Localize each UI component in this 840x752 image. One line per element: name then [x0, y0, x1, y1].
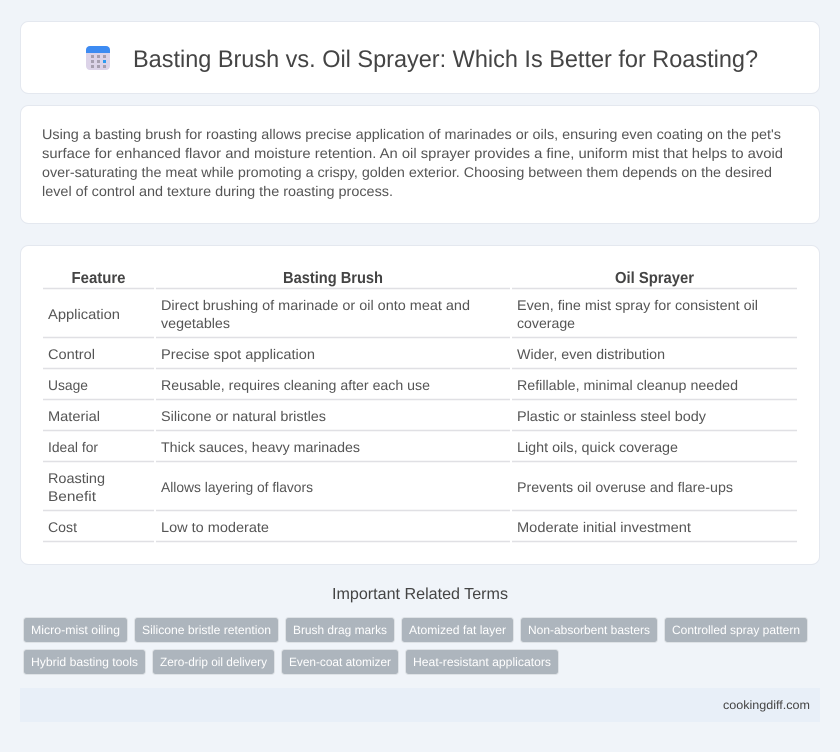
row: ideal for: [48, 439, 678, 455]
panel: header: [20, 22, 820, 94]
row: control: [48, 346, 665, 362]
row: material: Material: [48, 408, 100, 424]
icon: calendar: [86, 46, 110, 70]
row: application: [48, 297, 758, 331]
related term tags: Atomized fat layer: [409, 623, 506, 637]
related term tags: Heat-resistant applicators: [413, 655, 551, 669]
row: roasting benefit: Allows layering of flavors: [161, 479, 313, 495]
related term tags: Non-absorbent basters: [528, 623, 650, 637]
table header: Feature: [72, 270, 126, 287]
row: control: Wider, even distribution: [517, 346, 665, 362]
row: material: Silicone or natural bristles: [161, 408, 326, 424]
row: ideal for: Thick sauces, heavy marinades: [161, 439, 360, 455]
row: application: Application: [48, 306, 120, 322]
related term tags: Controlled spray pattern: [672, 623, 800, 637]
related term tags: Even-coat atomizer: [289, 655, 391, 669]
row: cost: Cost: [48, 519, 77, 535]
footer: [20, 688, 820, 722]
related term tags: Brush drag marks: [293, 623, 387, 637]
panel: comparison table: [20, 246, 820, 564]
table header: [72, 270, 694, 287]
intro text: Using a basting brush for roasting allows precise application of marinades or oils, ensuring even coating on the pet's: [42, 126, 781, 142]
row: ideal for: Light oils, quick coverage: [517, 439, 678, 455]
row: control: Control: [48, 346, 95, 362]
row: cost: Moderate initial investment: [517, 519, 691, 535]
related term tags: [24, 618, 808, 674]
intro text: over-saturating the meat while promoting a crispy, golden exterior. Choosing between them depends on the desired: [42, 164, 772, 180]
heading: related terms: Important Related Terms: [332, 586, 508, 603]
row: cost: [48, 519, 691, 535]
intro text: [42, 126, 783, 199]
table header: Basting Brush: [283, 270, 383, 287]
row: control: Precise spot application: [161, 346, 315, 362]
row: cost: Low to moderate: [161, 519, 269, 535]
related term tags: Hybrid basting tools: [31, 655, 138, 669]
row: material: [48, 408, 706, 424]
row: usage: [48, 377, 738, 393]
row: application: coverage: [517, 315, 575, 331]
intro text: surface for enhanced flavor and moisture retention. An oil sprayer provides a fine, uniform mist that helps to avoid: [42, 145, 783, 161]
row: application: Direct brushing of marinade or oil onto meat and: [161, 297, 470, 313]
related term tags: Zero-drip oil delivery: [160, 655, 267, 669]
row: roasting benefit: Roasting: [48, 470, 105, 486]
row: application: Even, fine mist spray for consistent oil: [517, 297, 758, 313]
row: usage: Refillable, minimal cleanup needed: [517, 377, 738, 393]
row: roasting benefit: [48, 470, 733, 504]
intro text: level of control and texture during the roasting process.: [42, 183, 393, 199]
related term tags: Silicone bristle retention: [142, 623, 271, 637]
footer: cookingdiff.com: [723, 698, 810, 712]
row: roasting benefit: Prevents oil overuse and flare-ups: [517, 479, 733, 495]
title: Basting Brush vs. Oil Sprayer: Which Is Better for Roasting?: [133, 46, 758, 73]
row: ideal for: Ideal for: [48, 439, 98, 455]
row: usage: Usage: [48, 377, 88, 393]
row: material: Plastic or stainless steel body: [517, 408, 706, 424]
row: usage: Reusable, requires cleaning after each use: [161, 377, 430, 393]
panel: intro: [20, 106, 820, 224]
related term tags: Micro-mist oiling: [31, 623, 120, 637]
row: application: vegetables: [161, 315, 230, 331]
table header: Oil Sprayer: [615, 270, 694, 287]
row: roasting benefit: Benefit: [48, 488, 96, 504]
